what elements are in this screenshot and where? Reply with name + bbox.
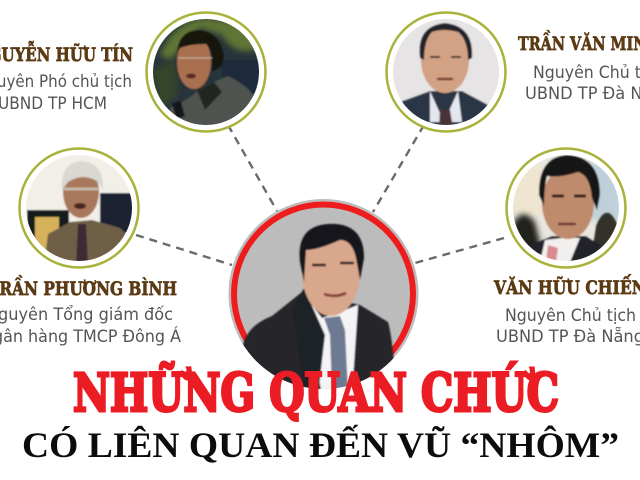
portrait: Trần Phương Bình [20,148,138,268]
portrait: Văn Hữu Chiến [506,148,626,268]
role: Trần Phương Bình [0,305,182,346]
subtitle: Có liên quan đến vũ "Nhôm": CÓ LIÊN QUAN ĐẾN VŨ “NHÔM” [22,425,619,465]
role: Nguyễn Hữu Tín [0,72,132,113]
portrait: Nguyễn Hữu Tín [146,12,266,132]
role: Trần Văn Minh [525,63,640,103]
role: Văn Hữu Chiến: Nguyên Chủ tịch [505,306,636,325]
role: Nguyễn Hữu Tín: UBND TP HCM [0,94,107,113]
central portrait: Vũ "Nhôm" [228,199,418,395]
role: Văn Hữu Chiến [496,306,640,346]
portrait: Trần Văn Minh [386,12,506,132]
dashed connector lines [136,125,504,265]
